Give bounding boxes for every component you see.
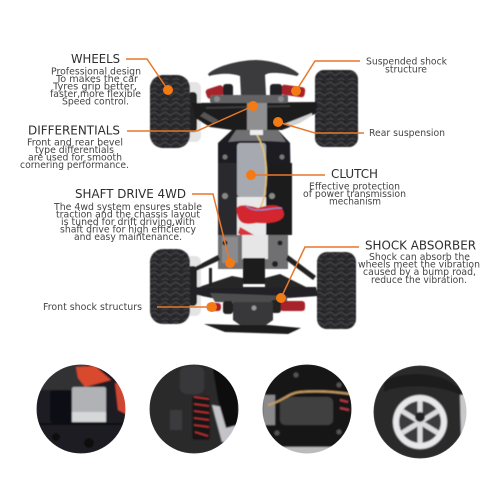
front bumper (204, 302, 301, 334)
text: differentials description (20, 138, 129, 171)
text: differentials description: Front and rear bevel (27, 138, 123, 148)
leader line: suspended shock (296, 61, 360, 91)
heading: differentials: DIFFERENTIALS (28, 122, 120, 138)
text: shaft drive description: traction and the chassis layout (56, 210, 200, 220)
rear left wheel (150, 75, 201, 148)
text: shaft drive description: The 4wd system ensures stable (53, 202, 202, 213)
marker: clutch (246, 170, 256, 180)
callout: wheels (50, 51, 173, 108)
detail photo: clutch housing (262, 364, 352, 455)
detail photo: wheel and tyre (373, 365, 468, 459)
front shock absorbers (207, 300, 305, 314)
detail photo: shock absorber (149, 364, 239, 454)
label: suspended shock (366, 57, 447, 76)
callout: front shock structurs (43, 302, 217, 313)
label: suspended shock: Suspended shock (366, 57, 447, 68)
text: wheels description: faster,more flexible (50, 89, 141, 100)
leader line: wheels (126, 59, 168, 90)
rear bumper (208, 60, 299, 95)
rear right wheel (315, 70, 358, 147)
wires and red battery bundle (237, 135, 284, 248)
centre column (247, 103, 267, 133)
text: clutch description (303, 182, 406, 208)
text: differentials description: type differentials (35, 145, 114, 156)
text: wheels description: To makes the car (55, 74, 139, 85)
callout: shaft drive 4WD (53, 186, 235, 268)
front chassis section (218, 235, 288, 284)
marker: suspended shock (291, 86, 301, 96)
text: shaft drive description: is tuned for drift driving,with (61, 217, 195, 228)
rear axle bar (210, 95, 288, 103)
rear shock absorbers (205, 84, 306, 100)
front left wheel (150, 249, 201, 324)
leader line: differentials (127, 106, 253, 131)
rear suspension arms (192, 102, 317, 130)
text: clutch description: Effective protection (309, 182, 400, 192)
callout: differentials (20, 101, 258, 171)
front suspension arms (192, 255, 318, 298)
text: shaft drive description: shaft drive for high efficiency (60, 224, 196, 236)
heading: wheels: WHEELS (71, 51, 120, 66)
heading: shock absorber: SHOCK ABSORBER (365, 238, 476, 252)
callout: suspended shock structure (291, 57, 447, 96)
marker: wheels (163, 85, 173, 95)
text: shaft drive description: and easy maintenance. (74, 232, 182, 243)
text: shock absorber description: caused by a bump road, (363, 267, 476, 278)
leader line: front shock (157, 306, 212, 308)
heading: clutch: CLUTCH (331, 166, 378, 181)
heading: shaft drive: SHAFT DRIVE 4WD (75, 186, 186, 201)
text: differentials description: are used for smooth (28, 152, 122, 164)
leader line: clutch (251, 174, 325, 176)
marker: front shock (207, 302, 217, 312)
leader line: shaft drive (192, 194, 230, 263)
leader line: shock absorber (281, 247, 359, 298)
chassis tub (218, 130, 292, 235)
label: rear suspension: Rear suspension (369, 128, 445, 139)
detail photo: drive shaft (36, 364, 126, 454)
text: shock absorber description: Shock can absorb the (369, 252, 470, 263)
text: wheels description: Professional design (51, 66, 141, 78)
callout: shock absorber (276, 238, 480, 303)
marker: shaft drive (225, 258, 235, 268)
callout: clutch (246, 166, 406, 208)
RC truck top view (150, 60, 358, 334)
marker: differentials (248, 101, 258, 111)
label: suspended shock: structure (385, 64, 427, 76)
infographic: RC truck chassis features (20, 54, 480, 458)
marker: rear suspension (273, 117, 283, 127)
front right wheel (317, 252, 356, 329)
text: wheels description: Tyres grip better, (52, 82, 137, 92)
marker: shock absorber (276, 293, 286, 303)
label: front shock: Front shock structurs (43, 302, 142, 313)
leader line: rear suspension (278, 122, 364, 133)
text: clutch description: mechanism (329, 196, 381, 208)
text: shock absorber description: reduce the vibration. (371, 275, 467, 286)
text: differentials description: cornering performance. (20, 160, 129, 171)
text: wheels description: Speed control. (62, 96, 129, 108)
text: wheels description (50, 66, 141, 108)
front axle bar (210, 293, 287, 303)
text: shock absorber description: wheels meet the vibration (358, 260, 480, 270)
text: shock absorber description (358, 252, 480, 286)
callout: rear suspension (273, 117, 445, 139)
text: shaft drive description (53, 202, 202, 243)
text: clutch description: of power transmission (303, 189, 406, 200)
